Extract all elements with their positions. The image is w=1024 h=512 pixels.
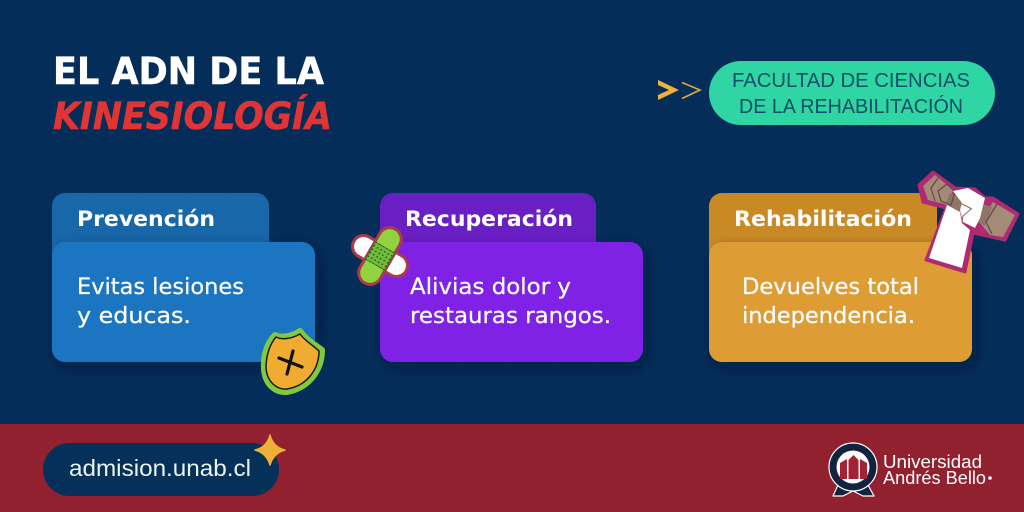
panel tab <box>380 193 596 263</box>
logo wordmark <box>883 452 992 488</box>
panel body: independencia. <box>742 304 915 329</box>
icon: shield <box>264 331 322 392</box>
footer band <box>0 424 1024 512</box>
faculty badge <box>709 61 995 125</box>
panel tab <box>52 193 269 263</box>
icon: double chevrons <box>658 80 700 100</box>
logo seal <box>829 443 877 496</box>
panel body <box>709 242 972 362</box>
panel body: Evitas lesiones <box>77 275 244 300</box>
panel tab: Rehabilitación <box>734 207 912 231</box>
panel tab: Prevención <box>77 207 215 231</box>
title <box>53 50 332 138</box>
panel body <box>380 242 643 362</box>
title: KINESIOLOGÍA <box>53 94 332 138</box>
faculty badge: DE LA REHABILITACIÓN <box>739 95 963 118</box>
panel body: Devuelves total <box>742 275 919 300</box>
logo: Universidad Andrés Bello <box>829 443 992 496</box>
panel body: y educas. <box>77 304 191 329</box>
logo wordmark: Universidad <box>883 452 982 472</box>
panel body <box>52 242 315 362</box>
panel tab: Recuperación <box>405 207 573 231</box>
panel: Rehabilitación <box>709 193 972 362</box>
website pill: admision.unab.cl <box>69 455 251 481</box>
logo wordmark: Andrés Bello <box>883 468 986 488</box>
panel: Recuperación <box>380 193 643 362</box>
panel tab <box>709 193 937 263</box>
panel body: restauras rangos. <box>410 304 611 329</box>
icon: dumbbell in raised hand <box>919 172 1018 272</box>
title: EL ADN DE LA <box>53 50 324 93</box>
panel body: Alivias dolor y <box>410 275 571 300</box>
website pill <box>43 443 279 496</box>
icon: sparkle <box>255 435 285 465</box>
faculty badge: FACULTAD DE CIENCIAS <box>732 70 970 92</box>
icon: bandage <box>339 214 421 298</box>
panel: Prevención <box>52 193 315 362</box>
